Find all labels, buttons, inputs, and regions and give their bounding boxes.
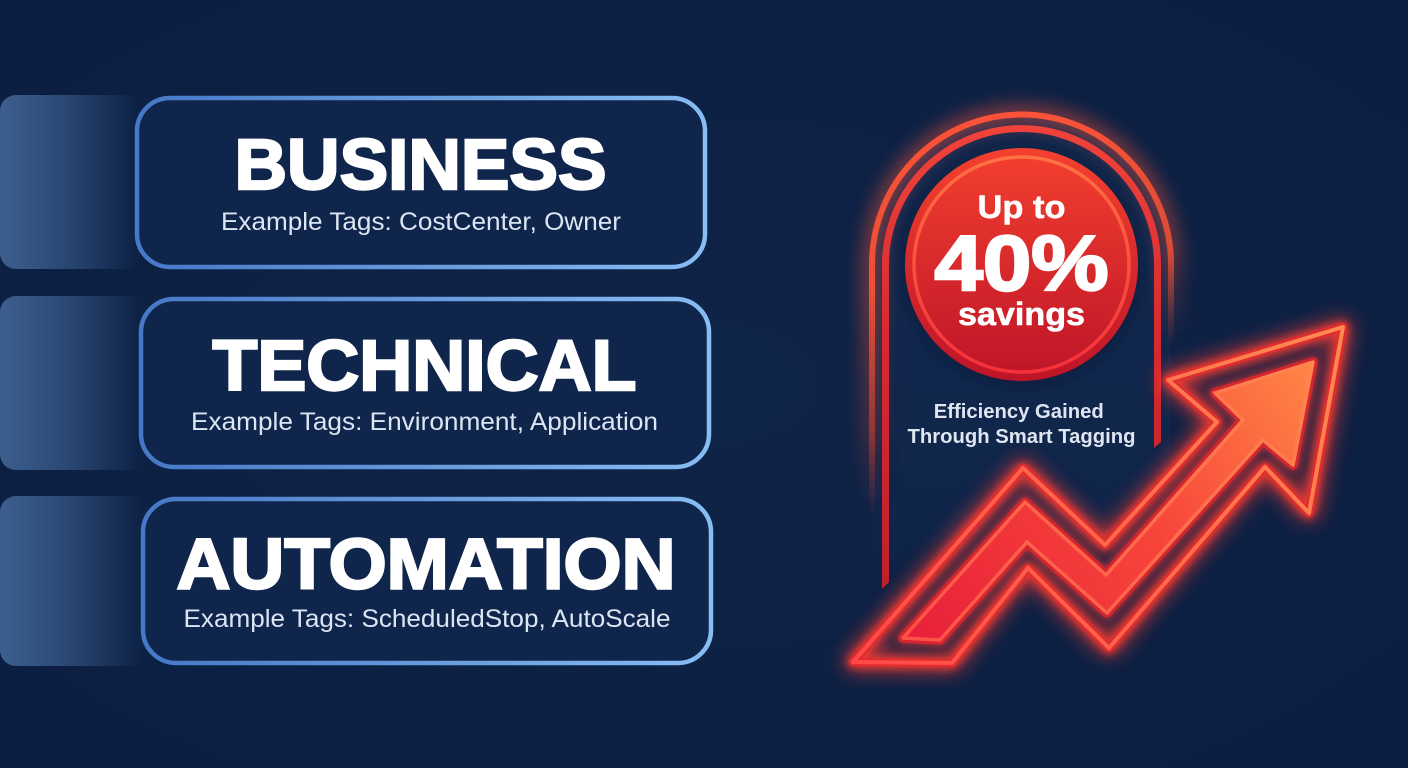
arrow inner glow [903,362,1313,640]
technical example tags: Example Tags: Environment, Application [191,408,658,436]
technical card [141,299,709,467]
arrow inner edge [903,362,1313,640]
arrow outer outline [853,327,1343,663]
efficiency caption: Efficiency Gained [934,401,1104,423]
up to label: Up to [978,189,1066,225]
savings disc [905,148,1138,381]
icon: rising neon arrow [853,327,1343,663]
technical heading: TECHNICAL [212,327,636,406]
outer arch [872,114,1171,520]
savings label: savings [958,296,1085,332]
outer arch glow [872,114,1171,500]
40 percent figure: 40% [934,219,1108,307]
efficiency caption: Through Smart Tagging [908,426,1136,448]
panel: automation [0,496,711,666]
arrow outer tight glow [853,327,1343,663]
arrow outer highlight [853,327,1343,663]
technical side tab [0,296,150,470]
automation heading: AUTOMATION [176,526,676,604]
circle shadow [902,147,1140,385]
arrow body highlight [903,362,1313,640]
disc ring [914,157,1129,372]
panel: technical [0,296,709,470]
panel: business [0,95,705,269]
automation side tab [0,496,152,666]
inner arch [882,125,1161,589]
arrow outer wide glow [853,327,1343,663]
panel: savings badge [872,114,1171,620]
automation card [143,499,711,663]
business example tags: Example Tags: CostCenter, Owner [221,208,621,236]
business heading: BUSINESS [234,126,606,205]
business side tab [0,95,146,269]
business card [137,98,705,267]
automation example tags: Example Tags: ScheduledStop, AutoScale [184,605,670,633]
arch interior [872,114,1171,620]
